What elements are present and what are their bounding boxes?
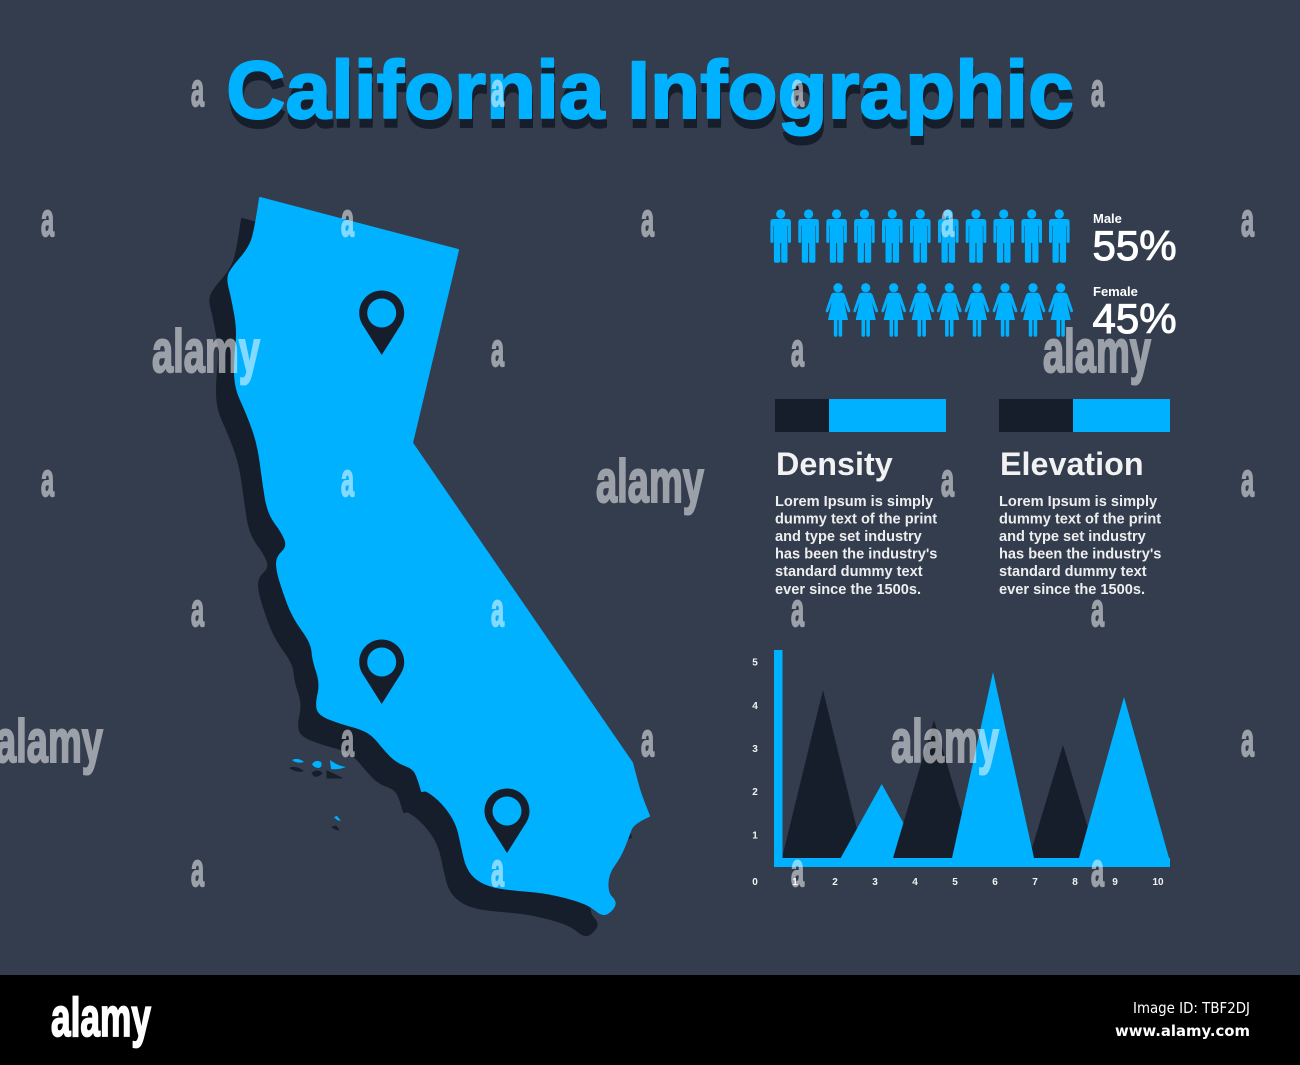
watermark stamps: a [641, 193, 654, 246]
watermark stamps: alamy [596, 448, 704, 515]
x axis labels: 7 [1032, 877, 1038, 888]
x axis labels: 10 [1152, 877, 1164, 888]
map pin south [484, 788, 530, 853]
panel: elevation [999, 399, 1170, 598]
watermark stamps: a [491, 843, 504, 896]
watermark stamps: a [1241, 193, 1254, 246]
watermark stamps: a [791, 63, 804, 116]
map shadow [210, 219, 631, 935]
watermark stamps: a [941, 193, 954, 246]
male pictogram row [770, 209, 1070, 263]
footer url: www.alamy.com [1115, 1022, 1250, 1040]
watermark stamps: a [491, 583, 504, 636]
male stat: 55% [1092, 222, 1177, 269]
title: California Infographic [226, 45, 1074, 136]
elevation heading: Elevation [1000, 446, 1144, 482]
density text [775, 494, 937, 598]
x axis labels: 8 [1072, 877, 1078, 888]
watermark stamps: a [41, 193, 54, 246]
watermark stamps: a [791, 583, 804, 636]
x axis labels: 4 [912, 877, 918, 888]
watermark stamps: a [191, 843, 204, 896]
elevation bar [999, 399, 1170, 432]
y axis labels: 3 [752, 744, 758, 755]
watermark stamps: a [1091, 63, 1104, 116]
watermark stamps: alamy [1043, 318, 1151, 385]
title: California Infographic [227, 54, 1075, 145]
elevation text: dummy text of the print [999, 512, 1161, 528]
density text: has been the industry's [775, 546, 937, 562]
x axis labels [752, 877, 1164, 888]
density text: standard dummy text [775, 564, 923, 580]
density text: Lorem Ipsum is simply [775, 494, 934, 510]
elevation text: and type set industry [999, 529, 1147, 545]
watermark stamps: a [791, 843, 804, 896]
x axis labels: 1 [792, 877, 798, 888]
footer bar [0, 975, 1300, 1065]
x axis labels: 5 [952, 877, 958, 888]
elevation text: has been the industry's [999, 546, 1161, 562]
y axis labels: 2 [752, 787, 758, 798]
watermark stamps: a [1091, 583, 1104, 636]
density bar [775, 399, 946, 432]
channel islands [292, 759, 346, 821]
watermark stamps [0, 63, 1254, 896]
elevation text: ever since the 1500s. [999, 582, 1145, 598]
density text: ever since the 1500s. [775, 582, 921, 598]
y axis labels: 4 [752, 701, 758, 712]
footer logo: alamy [51, 986, 151, 1048]
female pictogram row [826, 283, 1073, 337]
map pin north [359, 290, 404, 355]
elevation text [999, 494, 1161, 598]
watermark stamps: a [341, 713, 354, 766]
watermark stamps: a [491, 323, 504, 376]
elevation text: standard dummy text [999, 564, 1147, 580]
watermark stamps: a [1091, 843, 1104, 896]
watermark stamps: alamy [152, 318, 260, 385]
x axis labels: 0 [752, 877, 758, 888]
density text: dummy text of the print [775, 512, 937, 528]
panel: density [775, 399, 946, 598]
watermark stamps: a [1241, 453, 1254, 506]
female stat: Female [1093, 284, 1138, 299]
watermark stamps: a [341, 193, 354, 246]
x axis labels: 3 [872, 877, 878, 888]
watermark stamps: a [791, 323, 804, 376]
x axis labels: 6 [992, 877, 998, 888]
watermark stamps: a [641, 713, 654, 766]
density text: and type set industry [775, 529, 923, 545]
watermark stamps: a [1241, 713, 1254, 766]
watermark stamps: a [191, 63, 204, 116]
x axis labels: 2 [832, 877, 838, 888]
watermark stamps: a [341, 453, 354, 506]
y axis labels [752, 658, 758, 842]
map pin central [359, 640, 404, 704]
density heading: Density [776, 446, 893, 482]
elevation text: Lorem Ipsum is simply [999, 494, 1158, 510]
footer image id: Image ID: TBF2DJ [1133, 999, 1250, 1017]
male stat: Male [1093, 211, 1122, 226]
watermark stamps: a [191, 583, 204, 636]
map shape [228, 198, 649, 914]
triangles and axes [774, 650, 1170, 867]
watermark stamps: alamy [891, 708, 999, 775]
watermark stamps: a [491, 63, 504, 116]
y axis labels: 1 [752, 830, 758, 842]
watermark stamps: a [941, 453, 954, 506]
map: California [210, 198, 649, 935]
x axis labels: 9 [1112, 877, 1118, 888]
triangle chart [752, 650, 1170, 888]
female stat: 45% [1092, 295, 1177, 342]
y axis labels: 5 [752, 658, 758, 668]
watermark stamps: alamy [0, 708, 103, 775]
watermark stamps: a [41, 453, 54, 506]
